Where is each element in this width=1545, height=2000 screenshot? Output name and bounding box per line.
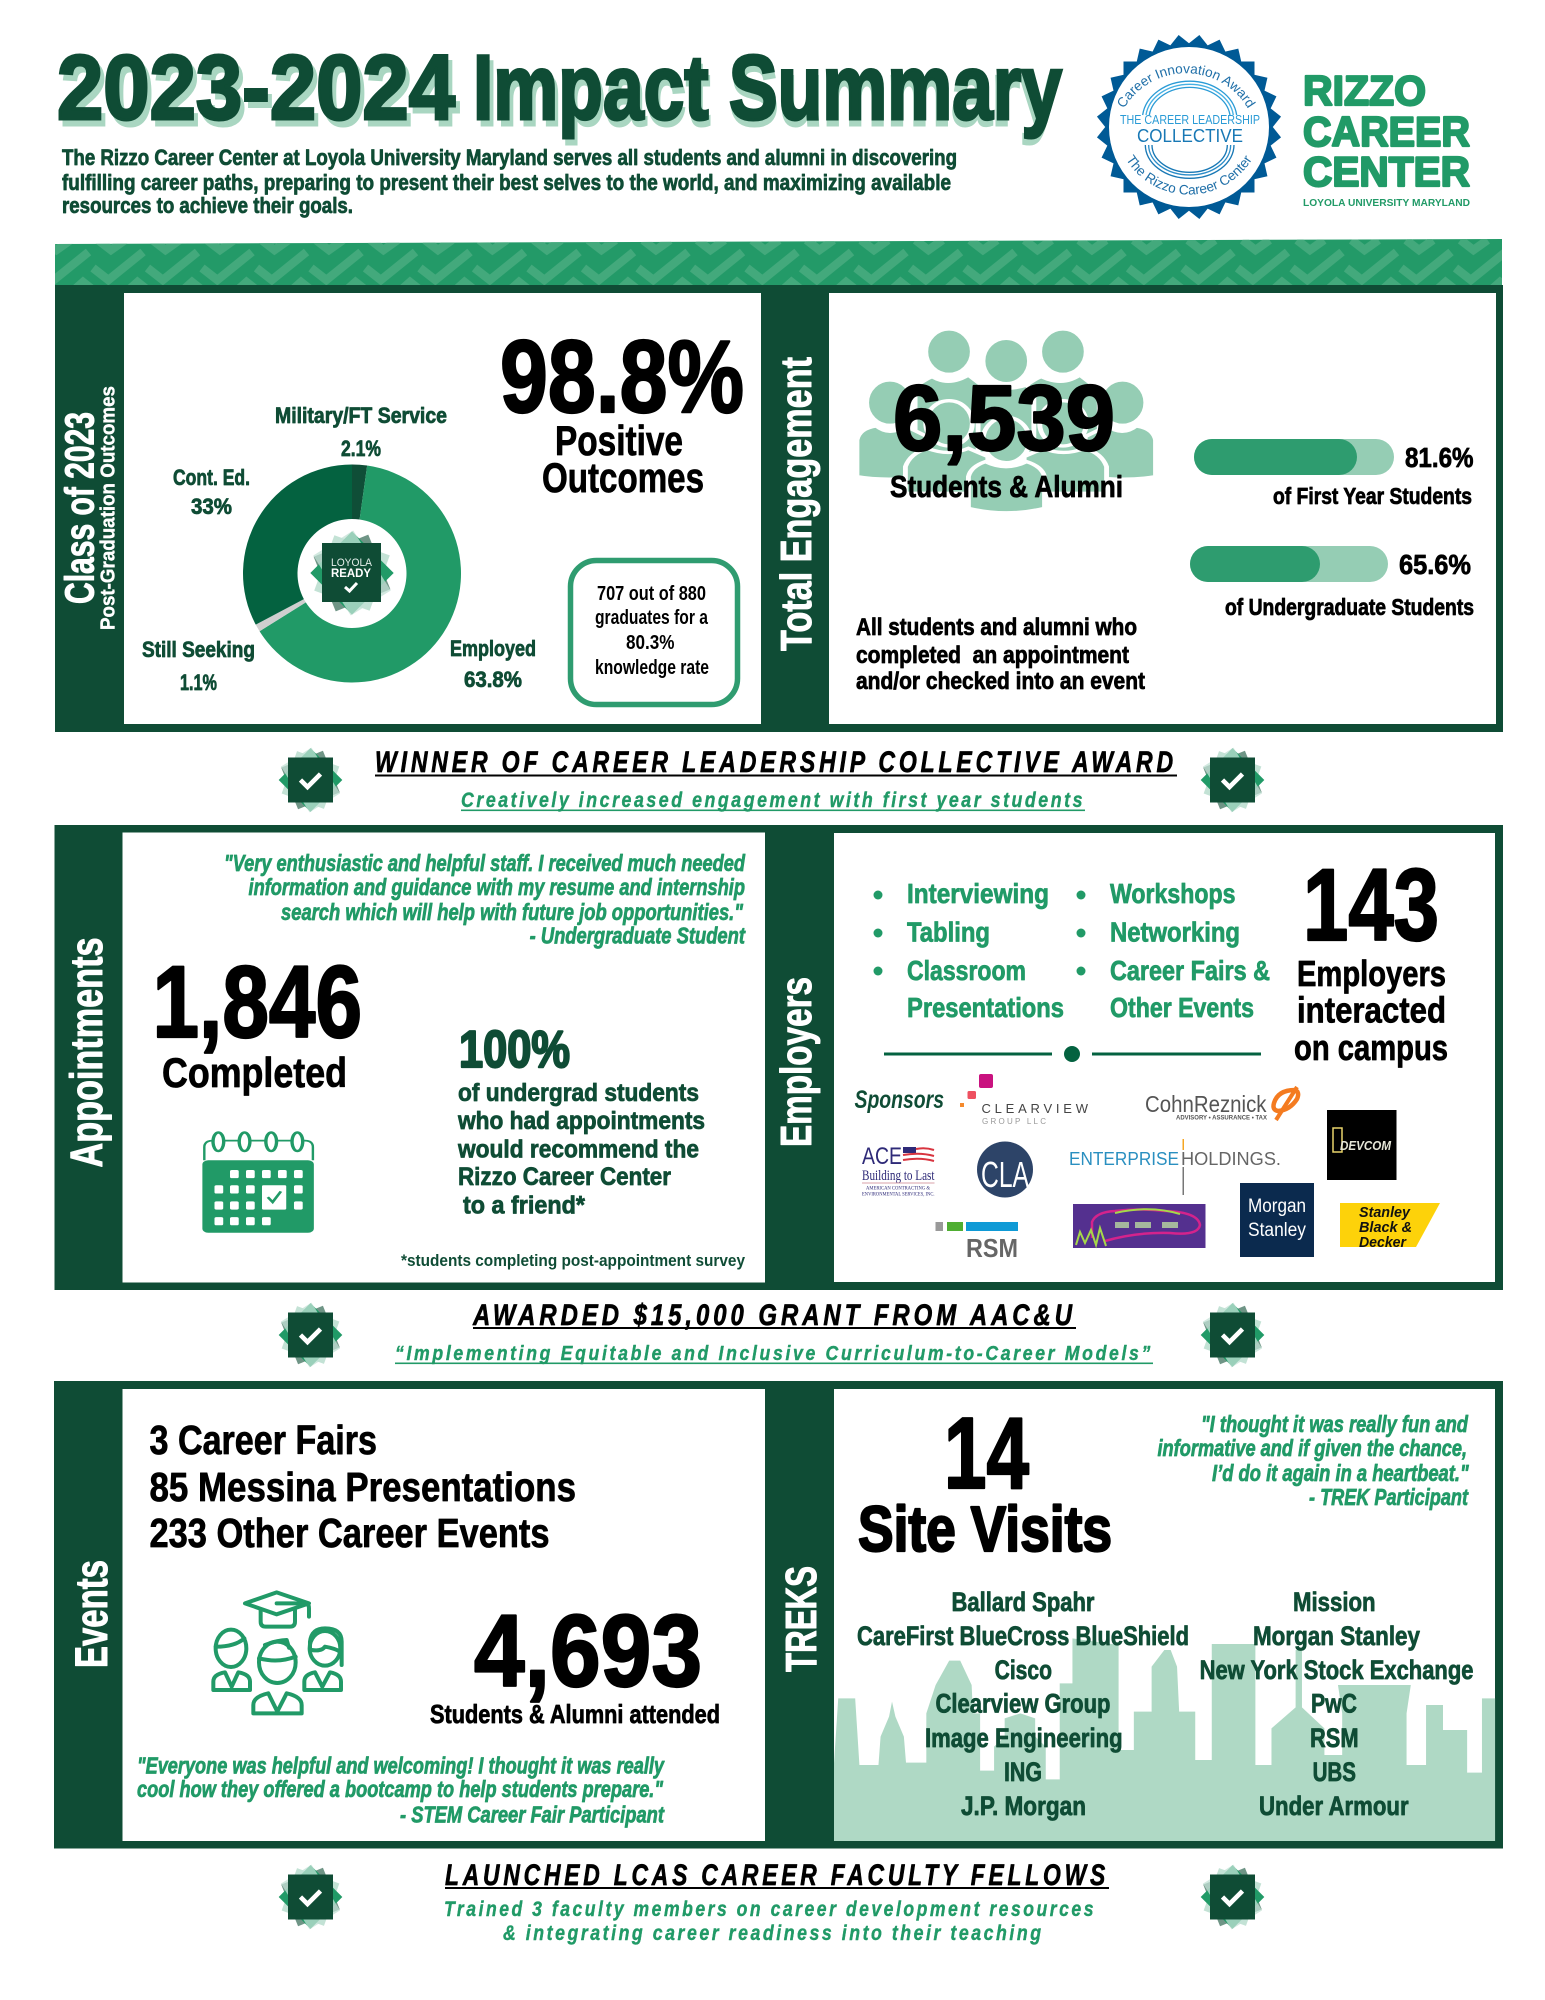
employer activities list: Networking <box>1110 917 1240 948</box>
logo: CohnReznick: ADVISORY • ASSURANCE • TAX <box>1176 1114 1268 1122</box>
student quote: search which will help with future job opportunities." <box>281 899 744 925</box>
big stat: 1,846 completed <box>152 945 362 1096</box>
employer activities list: Career Fairs & <box>1110 955 1270 986</box>
employer activities list <box>874 878 1270 1023</box>
trek quote <box>1158 1411 1470 1510</box>
logo: ACE: ENVIRONMENTAL SERVICES, INC. <box>862 1192 935 1198</box>
big stat: 1,846 completed: Completed <box>162 1049 347 1096</box>
logo: Morgan Stanley <box>1240 1183 1314 1257</box>
employer activities list: Other Events <box>1110 992 1254 1023</box>
logo: Clearview Group: GROUP LLC <box>982 1117 1046 1126</box>
site visit list right: New York Stock Exchange <box>1200 1655 1474 1685</box>
sponsors heading: Sponsors <box>854 1086 944 1114</box>
big stat: 143 employers <box>1294 848 1448 1068</box>
icon: check badge right <box>1201 1303 1264 1367</box>
logo: Rizzo Career Center <box>1303 67 1470 209</box>
site visit list right: Mission <box>1293 1587 1376 1617</box>
progress bar: undergraduate students <box>1190 546 1474 620</box>
panel: employers <box>765 825 1503 1290</box>
panel: class of 2023 outcomes <box>55 285 761 732</box>
progress bar: first year students: 81.6% <box>1405 442 1474 473</box>
panel: total engagement <box>761 285 1503 732</box>
trek quote: informative and if given the chance, <box>1158 1435 1467 1461</box>
sidebar heading: Class of 2023: Post-Graduation Outcomes <box>96 386 120 630</box>
logo: Rizzo Career Center: RIZZO <box>1303 67 1426 114</box>
big stat: 98.8% positive outcomes: Outcomes <box>542 454 704 501</box>
callout: knowledge rate <box>570 560 738 704</box>
event counts: 3 Career Fairs <box>150 1417 377 1463</box>
site visit list left: Image Engineering <box>925 1723 1123 1753</box>
intro text block: fulfilling career paths, preparing to present their best selves to the world, and maximizing available <box>62 170 951 195</box>
logo: event banner <box>1073 1204 1206 1248</box>
logo: CohnReznick: CohnReznick <box>1145 1091 1267 1117</box>
stat: 100% recommend: Rizzo Career Center <box>458 1163 671 1191</box>
logo: Stanley Black & Decker <box>1340 1203 1440 1251</box>
student quote: information and guidance with my resume and internship <box>248 874 745 900</box>
employer activities list: Tabling <box>907 917 990 948</box>
progress bar: first year students: of First Year Students <box>1273 483 1472 509</box>
icon: check badge <box>279 1303 342 1367</box>
site visit list right: Under Armour <box>1259 1791 1409 1821</box>
engagement definition text: and/or checked into an event <box>856 668 1145 695</box>
callout: knowledge rate: graduates for a <box>595 607 709 629</box>
logo: Enterprise Holdings <box>1069 1139 1281 1195</box>
logo: ACE: AMERICAN CONTRACTING & <box>866 1186 931 1192</box>
big stat: 14 site visits <box>858 1398 1112 1565</box>
donut labels: Employed <box>450 636 536 661</box>
logo: CLA <box>977 1142 1033 1198</box>
stat: 100% recommend: to a friend* <box>463 1192 585 1220</box>
skyline illustration <box>834 1638 1495 1841</box>
employer activities list: Presentations <box>907 992 1064 1023</box>
award subheading: Creatively increased engagement with first year students <box>461 789 1085 812</box>
title: 2023-2024 <box>57 37 455 139</box>
panel: appointments <box>54 825 766 1290</box>
site visit list left: ING <box>1004 1757 1042 1787</box>
stat: 100% recommend <box>457 1021 705 1220</box>
stat: 100% recommend: of undergrad students <box>458 1079 699 1107</box>
engagement definition text <box>856 614 1145 695</box>
logo: RSM <box>936 1222 1018 1263</box>
big stat: 4,693 attended <box>430 1594 720 1729</box>
big stat: 143 employers: on campus <box>1294 1027 1448 1068</box>
big stat: 6,539 students and alumni: 6,539 <box>893 366 1115 470</box>
event counts: 85 Messina Presentations <box>150 1464 576 1510</box>
student quote <box>224 850 746 949</box>
site visit list left <box>857 1587 1189 1821</box>
site visit list right <box>1200 1587 1474 1821</box>
faculty fellows description: & integrating career readiness into their teaching <box>503 1922 1044 1945</box>
employer activities list: Interviewing <box>907 878 1049 909</box>
big stat: 6,539 students and alumni: Students & Alumni <box>890 469 1123 504</box>
employer activities list: Workshops <box>1110 878 1236 909</box>
big stat: 143 employers: Employers <box>1297 953 1446 994</box>
engagement definition text: completed an appointment <box>856 642 1129 669</box>
donut labels: 2.1% <box>341 436 381 461</box>
stat: 100% recommend: who had appointments <box>457 1107 705 1135</box>
site visit list left: Ballard Spahr <box>952 1587 1095 1617</box>
site visit list left: CareFirst BlueCross BlueShield <box>857 1621 1189 1651</box>
donut labels: Cont. Ed. <box>173 465 250 490</box>
icon: Loyola Ready badge <box>310 531 394 615</box>
logo: DEVCOM: DEVCOM <box>1340 1138 1392 1153</box>
big stat: 98.8% positive outcomes <box>500 319 744 501</box>
trek quote: - TREK Participant <box>1309 1484 1469 1510</box>
chevron band <box>55 239 1502 286</box>
logo: ACE: ACE <box>862 1143 902 1170</box>
event counts: 233 Other Career Events <box>150 1510 550 1556</box>
faculty fellows description: Trained 3 faculty members on career development resources <box>444 1898 1096 1921</box>
big stat: 4,693 attended: Students & Alumni attended <box>430 1699 720 1729</box>
logo: Stanley Black & Decker: Stanley <box>1359 1204 1411 1221</box>
donut labels: 33% <box>191 494 232 519</box>
logo: CLA: CLA <box>981 1154 1029 1195</box>
icon: graduates <box>213 1592 342 1713</box>
title: 2023-2024 <box>61 43 459 145</box>
site visit list left: J.P. Morgan <box>961 1791 1086 1821</box>
logo: Rizzo Career Center: CAREER <box>1303 108 1470 155</box>
callout: knowledge rate: knowledge rate <box>595 657 709 679</box>
title <box>57 37 1062 145</box>
survey footnote: *students completing post-appointment survey <box>401 1251 745 1270</box>
callout: knowledge rate: 707 out of 880 <box>597 583 706 605</box>
sidebar heading: Class of 2023 <box>56 386 120 630</box>
panel: treks <box>765 1381 1503 1848</box>
icon: check badge right <box>1201 1865 1264 1929</box>
logo: RSM: RSM <box>966 1233 1018 1263</box>
site visit list right: Morgan Stanley <box>1253 1621 1420 1651</box>
progress bar: undergraduate students: 65.6% <box>1399 549 1471 580</box>
career fair quote: cool how they offered a bootcamp to help students prepare." <box>137 1776 664 1802</box>
icon: calendar <box>202 1132 314 1233</box>
career fair quote: "Everyone was helpful and welcoming! I thought it was really <box>137 1753 665 1779</box>
logo: Clearview Group <box>960 1074 1089 1126</box>
faculty fellows description <box>444 1898 1096 1945</box>
icon: Loyola Ready badge: LOYOLA <box>331 557 373 569</box>
intro text block <box>62 145 957 218</box>
stat: 100% recommend: 100% <box>459 1021 570 1079</box>
career fair quote <box>137 1753 665 1828</box>
icon: people group <box>857 329 1156 513</box>
intro text block: resources to achieve their goals. <box>62 193 353 218</box>
logo: Stanley Black & Decker: Black & <box>1359 1219 1412 1236</box>
sidebar heading: Events: Events <box>66 1560 117 1668</box>
site visit list right: PwC <box>1311 1689 1357 1719</box>
big stat: 98.8% positive outcomes: 98.8% <box>500 319 744 434</box>
logo: Enterprise Holdings: HOLDINGS. <box>1181 1149 1281 1169</box>
logo: CohnReznick <box>1145 1087 1298 1122</box>
big stat: 4,693 attended: 4,693 <box>474 1594 702 1708</box>
title: Impact Summary <box>477 43 1060 145</box>
stat: 100% recommend: would recommend the <box>457 1136 699 1164</box>
donut labels <box>142 403 536 695</box>
callout: knowledge rate: 80.3% <box>626 632 675 654</box>
logo: Clearview Group: CLEARVIEW <box>982 1101 1089 1116</box>
site visit list left: Cisco <box>995 1655 1052 1685</box>
engagement definition text: All students and alumni who <box>856 614 1137 641</box>
big stat: 14 site visits: 14 <box>944 1398 1029 1510</box>
faculty fellows heading: LAUNCHED LCAS CAREER FACULTY FELLOWS <box>445 1859 1109 1892</box>
employer activities list: Classroom <box>907 955 1026 986</box>
award seal: COLLECTIVE <box>1137 126 1243 146</box>
sidebar heading: Class of 2023: Class of 2023 <box>56 412 102 604</box>
donut labels: Military/FT Service <box>275 403 447 428</box>
logo: ACE: Building to Last <box>862 1168 935 1184</box>
site visit list left: Clearview Group <box>936 1689 1110 1719</box>
award seal <box>1097 35 1281 219</box>
event counts <box>150 1417 576 1556</box>
progress bar: undergraduate students: of Undergraduate Students <box>1225 594 1474 620</box>
grant subheading: “Implementing Equitable and Inclusive Curriculum-to-Career Models” <box>395 1343 1153 1365</box>
title: Impact Summary <box>473 37 1062 139</box>
trek quote: "I thought it was really fun and <box>1201 1411 1469 1437</box>
career fair quote: - STEM Career Fair Participant <box>400 1802 665 1828</box>
progress bar: first year students <box>1194 439 1474 509</box>
sidebar heading: TREKS: TREKS <box>777 1566 826 1672</box>
icon: Loyola Ready badge: READY <box>331 566 371 580</box>
site visit list right: RSM <box>1310 1723 1359 1753</box>
award banner 1 <box>279 746 1264 812</box>
grant heading: AWARDED $15,000 GRANT FROM AAC&U <box>472 1299 1076 1332</box>
donut chart <box>243 464 461 683</box>
sidebar heading: Appointments: Appointments <box>61 938 112 1168</box>
big stat: 98.8% positive outcomes: Positive <box>555 417 683 464</box>
award seal: Career Innovation Award <box>1118 66 1256 108</box>
logo: Morgan Stanley: Morgan <box>1248 1196 1306 1217</box>
student quote: "Very enthusiastic and helpful staff. I received much needed <box>224 850 746 876</box>
logo: Rizzo Career Center: LOYOLA UNIVERSITY MARYLAND <box>1303 198 1470 209</box>
big stat: 14 site visits: Site Visits <box>858 1493 1112 1565</box>
donut labels: 63.8% <box>464 667 522 692</box>
logo: DEVCOM <box>1327 1110 1396 1180</box>
sidebar heading: Total Engagement: Total Engagement <box>772 357 821 651</box>
site visit list right: UBS <box>1313 1757 1356 1787</box>
award heading: WINNER OF CAREER LEADERSHIP COLLECTIVE AWARD <box>375 746 1177 779</box>
icon: check badge <box>279 1865 342 1929</box>
sidebar heading: Employers: Employers <box>772 977 821 1147</box>
donut labels: Still Seeking <box>142 637 255 662</box>
big stat: 1,846 completed: 1,846 <box>152 945 362 1059</box>
icon: check badge <box>279 748 342 812</box>
award seal: The Rizzo Career Center <box>1128 154 1251 195</box>
big stat: 143 employers: interacted <box>1297 990 1446 1031</box>
logo: ACE <box>862 1143 935 1198</box>
big stat: 143 employers: 143 <box>1303 848 1439 962</box>
trek quote: I’d do it again in a heartbeat." <box>1212 1460 1470 1486</box>
award banner 3 <box>279 1859 1264 1945</box>
icon: check badge right <box>1201 748 1264 812</box>
logo: Enterprise Holdings: ENTERPRISE <box>1069 1149 1179 1169</box>
intro text block: The Rizzo Career Center at Loyola University Maryland serves all students and alumni in discovering <box>62 145 957 170</box>
award seal: THE CAREER LEADERSHIP <box>1120 113 1260 127</box>
student quote: - Undergraduate Student <box>530 923 746 949</box>
logo: Stanley Black & Decker: Decker <box>1359 1234 1407 1251</box>
logo: Morgan Stanley: Stanley <box>1248 1220 1306 1241</box>
donut labels: 1.1% <box>180 670 217 695</box>
panel: events <box>54 1381 765 1848</box>
logo: Rizzo Career Center: CENTER <box>1303 148 1470 195</box>
award banner 2 <box>279 1299 1264 1367</box>
